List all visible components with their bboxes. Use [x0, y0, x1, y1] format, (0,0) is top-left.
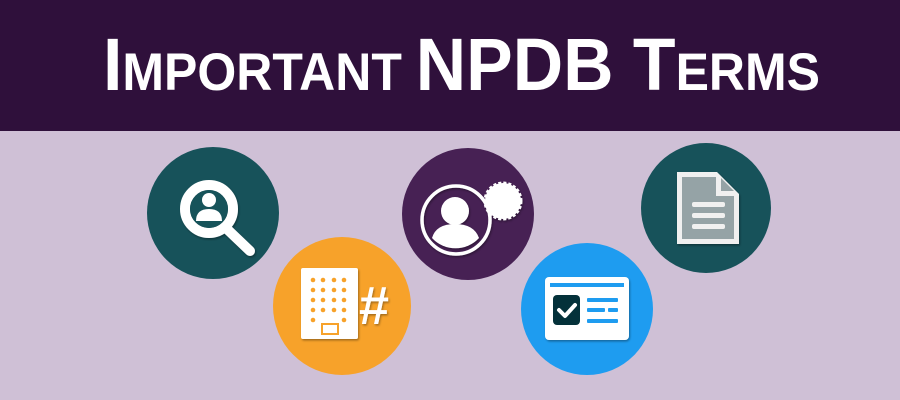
icon: building number: #: [359, 276, 389, 336]
icon: building number: [273, 237, 411, 375]
icon: user profile: [402, 148, 534, 280]
icon: practitioner search: [147, 147, 279, 279]
icon: verification card: [521, 243, 653, 375]
header banner: [0, 0, 900, 131]
title: IMPORTANT NPDB TERMS: [103, 23, 820, 106]
icon: document: [641, 143, 771, 273]
